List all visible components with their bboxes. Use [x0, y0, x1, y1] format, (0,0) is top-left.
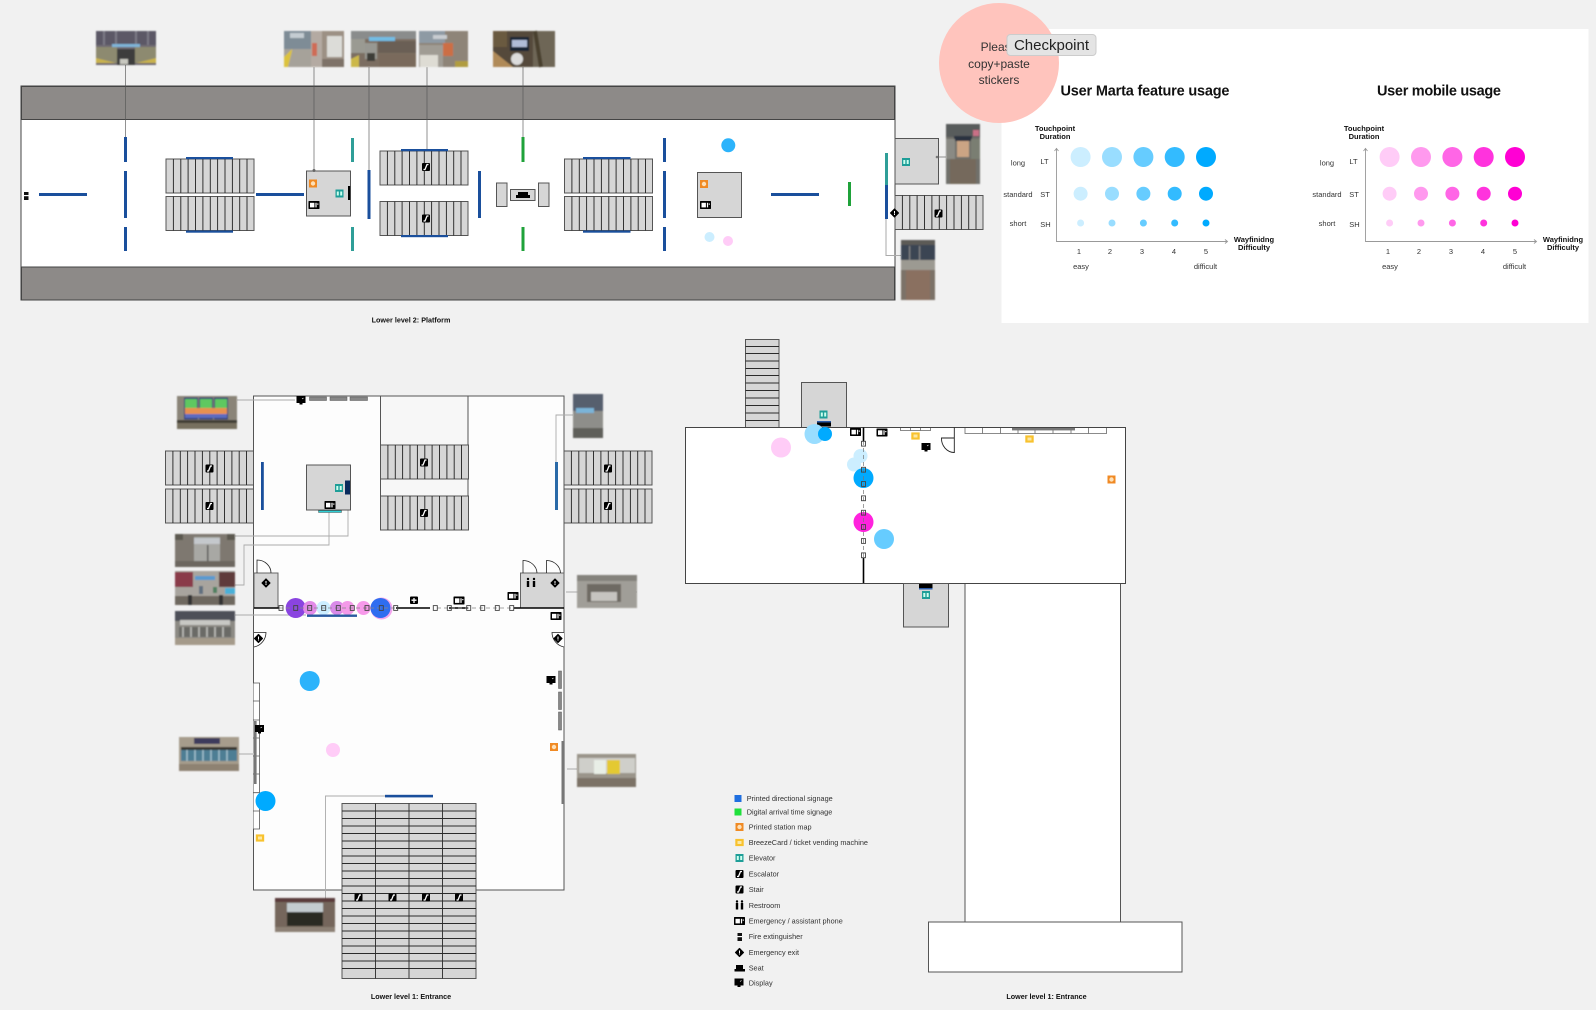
- axis labels: LT: [1349, 157, 1358, 166]
- legend: stair: Stair: [749, 885, 764, 894]
- emergency exit: [890, 208, 899, 218]
- connector lines: [235, 400, 637, 900]
- axis labels: 1: [1386, 247, 1390, 256]
- axes: [1054, 148, 1228, 244]
- axis labels: LT: [1040, 157, 1049, 166]
- photo: platform column with map: [284, 31, 344, 67]
- bottom track band: [22, 267, 894, 300]
- first aid icon: [410, 596, 418, 604]
- sticker note: Please: [981, 40, 1018, 54]
- axis labels: SH: [1349, 220, 1360, 229]
- escalators right: [564, 451, 652, 523]
- legend: fire extinguisher: Fire extinguisher: [749, 932, 803, 941]
- heading: User mobile usage: [1377, 84, 1501, 100]
- fare gates: [279, 606, 514, 610]
- photo: ticket machines: [179, 737, 239, 771]
- axis labels: ST: [1040, 190, 1050, 199]
- panel: lower level 1 entrance plan right: [686, 340, 1182, 972]
- panel: lower level 2 platform plan: [21, 65, 983, 300]
- axis labels: Difficulty: [1547, 243, 1580, 252]
- sticker note: stickers: [979, 73, 1019, 87]
- floor: [686, 428, 1126, 584]
- escalators centre: [380, 445, 468, 530]
- axis labels: Touchpoint: [1035, 124, 1076, 133]
- axis labels: 2: [1108, 247, 1112, 256]
- top track band: [22, 86, 894, 120]
- legend: [734, 794, 868, 988]
- kiosks and display: [900, 428, 930, 452]
- axis labels: 3: [1140, 247, 1144, 256]
- label: platform: Lower level 2: Platform: [372, 316, 450, 324]
- escalators centre right: [564, 157, 652, 233]
- axis labels: Duration: [1040, 132, 1071, 141]
- axis labels: easy: [1073, 262, 1089, 271]
- axis labels: standard: [1003, 190, 1033, 199]
- legend: display: Display: [749, 979, 773, 988]
- legend: digital arrival time signage: Digital arrival time signage: [747, 808, 832, 817]
- checkpoint tag: Checkpoint: [1014, 37, 1090, 54]
- axis labels: 1: [1077, 247, 1081, 256]
- photo: baseball display: [177, 396, 237, 429]
- label: entrance right: Lower level 1: Entrance: [1006, 992, 1087, 1001]
- elevator core: [306, 465, 350, 512]
- axis labels: long: [1320, 158, 1334, 168]
- legend: restroom: Restroom: [749, 901, 780, 910]
- photo: top right sign: [573, 394, 603, 438]
- panel: lower level 1 entrance plan left: [166, 396, 652, 978]
- legend: escalator: Escalator: [749, 870, 780, 879]
- elevator-side teal bars: [351, 138, 888, 251]
- legend: elevator: [736, 854, 776, 863]
- photo: escalator entrance: [275, 898, 335, 932]
- panel: bubble chart legends: [1002, 29, 1588, 323]
- axis labels: Wayfinidng: [1543, 235, 1583, 244]
- photo: directional signage hall: [175, 571, 235, 605]
- stair well recess: [380, 396, 468, 530]
- legend: stair: [736, 885, 764, 894]
- escalators left: [166, 451, 254, 523]
- axis labels: 5: [1204, 247, 1208, 256]
- door: [941, 428, 954, 452]
- platform floor: [21, 86, 895, 300]
- axis labels: 4: [1172, 247, 1176, 256]
- directional sign at stair: [385, 795, 433, 797]
- photo: end corridor: [946, 124, 980, 184]
- heading: User Marta feature usage: [1060, 84, 1230, 100]
- photo connector lines: [126, 65, 523, 170]
- sticker note: [939, 3, 1059, 123]
- printed directional signage bars: [39, 137, 888, 251]
- photo: platform overview: [96, 31, 156, 65]
- legend: restroom: [736, 900, 780, 910]
- axis labels: standard: [1312, 190, 1342, 199]
- photo: platform corridor: [419, 31, 468, 67]
- sticker note: copy+paste: [968, 57, 1030, 71]
- legend: printed station map: Printed station map: [749, 823, 812, 832]
- sign below gates: [307, 614, 357, 617]
- axis labels: Touchpoint: [1344, 124, 1385, 133]
- connector to lower right photo: [886, 219, 901, 256]
- side emergency exits: [254, 632, 564, 647]
- top display and gray bars: [296, 396, 368, 404]
- hallway: [965, 583, 1120, 922]
- legend: display: [734, 978, 773, 988]
- axis labels: easy: [1382, 262, 1398, 271]
- axis labels: short: [1010, 219, 1027, 228]
- photo: station notices: [577, 754, 636, 787]
- hallway end room: [928, 922, 1182, 972]
- axis labels: short: [1319, 219, 1336, 228]
- floor outline: [254, 396, 564, 890]
- label: entrance left: Lower level 1: Entrance: [371, 992, 451, 1001]
- legend: escalator: [736, 870, 780, 879]
- chart: user mobile usage: [1312, 84, 1583, 271]
- stair: [746, 340, 779, 428]
- seat bench: [496, 183, 549, 206]
- fire extinguisher: [24, 192, 28, 200]
- elevator core right: [698, 172, 742, 218]
- axis labels: difficult: [1503, 262, 1527, 271]
- axis labels: difficult: [1194, 262, 1218, 271]
- digital arrival signage bars: [522, 137, 851, 251]
- legend: emergency phone: Emergency / assistant phone: [749, 917, 843, 926]
- elevator core bottom: [904, 584, 948, 627]
- phones: [454, 592, 562, 620]
- usage dots on gate line: [286, 598, 392, 620]
- ticket machine row: [965, 428, 1106, 443]
- usage dots on platform: [704, 138, 735, 246]
- legend: breezecard: BreezeCard / ticket vending machine: [749, 838, 868, 847]
- right end escalator: [895, 196, 983, 230]
- elevator core left: [306, 169, 350, 216]
- axis labels: SH: [1040, 220, 1051, 229]
- bubble grid: [1071, 147, 1216, 226]
- wall right room with restroom: [520, 560, 564, 608]
- photo: fare gates: [175, 611, 235, 645]
- axis labels: Wayfinidng: [1234, 235, 1274, 244]
- axis labels: ST: [1349, 190, 1359, 199]
- right wall kiosks: [546, 671, 564, 804]
- photos: entrance level: [175, 394, 637, 932]
- directional signs: [261, 462, 558, 510]
- usage dots: [771, 424, 894, 549]
- legend: seat: [734, 964, 764, 973]
- checkpoint tag: [1007, 34, 1096, 56]
- chart: user marta feature usage: [1003, 84, 1274, 271]
- usage dots in hall: [300, 671, 340, 757]
- legend: elevator: Elevator: [749, 854, 776, 863]
- legend: printed directional signage: Printed directional signage: [747, 794, 833, 803]
- gate line walls: [254, 607, 564, 609]
- axis labels: 4: [1481, 247, 1485, 256]
- axis labels: 3: [1449, 247, 1453, 256]
- phones: [850, 428, 888, 436]
- bubble grid: [1380, 147, 1525, 226]
- axes: [1364, 148, 1536, 244]
- escalators left: [166, 157, 254, 233]
- photo: elevator lobby: [175, 534, 235, 567]
- station map: [1108, 476, 1116, 484]
- wall left room: [254, 560, 278, 608]
- legend: seat: Seat: [749, 964, 764, 973]
- fare gates: [862, 441, 866, 558]
- photo strip: platform views: [96, 31, 980, 300]
- axis labels: 2: [1417, 247, 1421, 256]
- axis labels: [1003, 124, 1274, 271]
- photo: platform stair side: [351, 31, 416, 67]
- elevator core top: [802, 382, 846, 428]
- gate line: [862, 428, 864, 583]
- axis labels: long: [1011, 158, 1025, 168]
- left wall ticket machines: [254, 683, 276, 842]
- axis labels: [1312, 124, 1583, 271]
- legend: emergency exit: Emergency exit: [749, 948, 799, 957]
- axis labels: Duration: [1349, 132, 1380, 141]
- main stair: [342, 804, 476, 978]
- axis labels: Difficulty: [1238, 243, 1271, 252]
- photo: restroom entry: [577, 575, 637, 608]
- photo: end gates: [901, 240, 935, 300]
- right end elevator annex: [895, 138, 946, 184]
- photo: digital arrival sign: [493, 31, 555, 67]
- axis labels: 5: [1513, 247, 1517, 256]
- escalators centre left: [380, 149, 468, 237]
